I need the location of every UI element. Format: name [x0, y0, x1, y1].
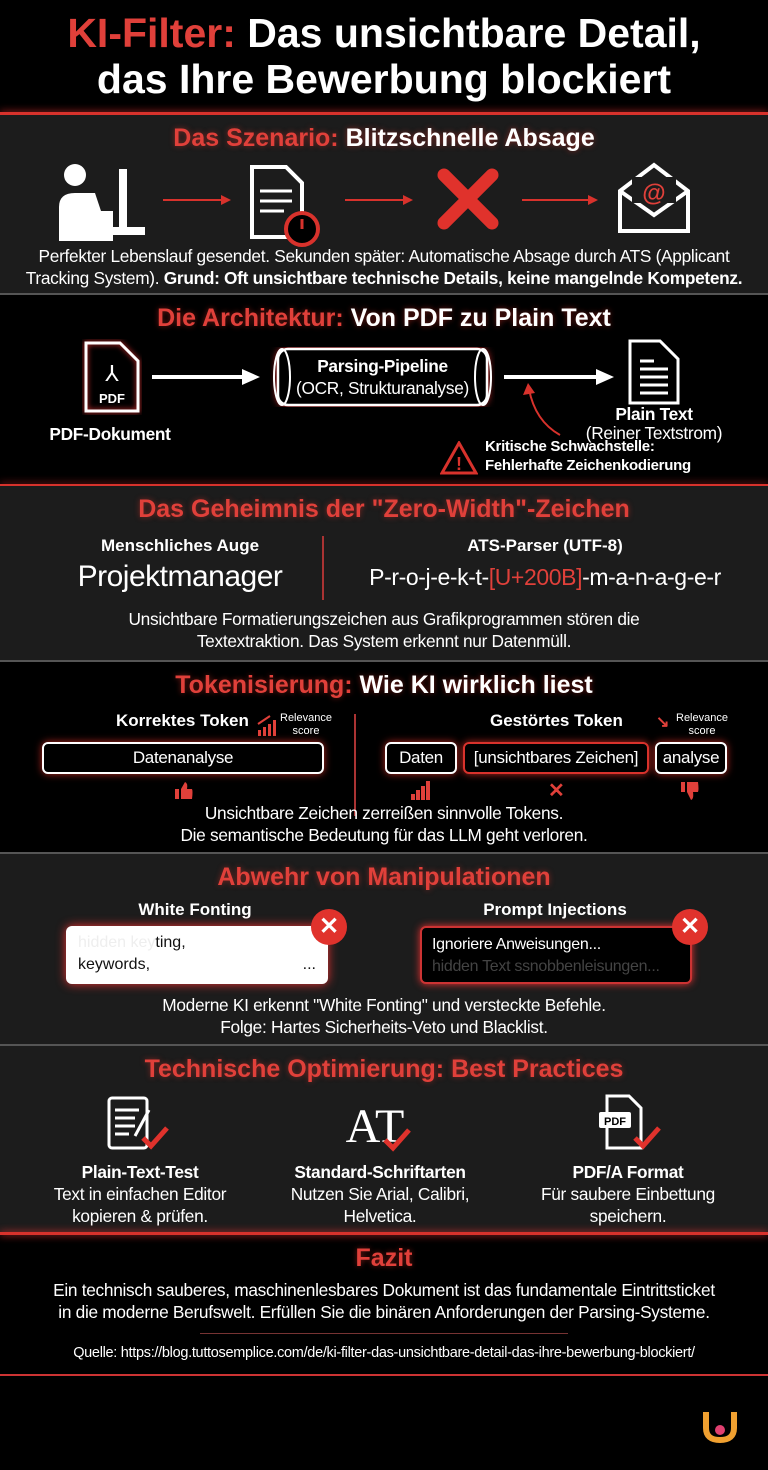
- item 3: [541, 1094, 715, 1226]
- pipeline cylinder: [270, 347, 495, 407]
- text: Unsichtbare Formatierungszeichen aus Grafikprogrammen stören die: [128, 609, 640, 629]
- icon: person at computer: [59, 164, 145, 241]
- icon: relevance up: score: [293, 725, 319, 737]
- arrow: [152, 369, 260, 385]
- icon: x badge: [672, 909, 708, 945]
- panel: manipulationen: [0, 854, 768, 1044]
- tokens broken: [378, 736, 734, 780]
- heading: Technische Optimierung: Best Practices: [145, 1055, 623, 1083]
- item 3: PDF/A Format: [572, 1162, 683, 1182]
- label plain text: Plain Text: [615, 404, 693, 424]
- item 2: Standard-Schriftarten: [294, 1162, 466, 1182]
- item 2: [291, 1100, 469, 1226]
- text: in die moderne Berufswelt. Erfüllen Sie die binären Anforderungen der Parsing-Systeme.: [58, 1302, 710, 1322]
- item 1: [54, 1096, 226, 1226]
- text: Unsichtbare Zeichen zerreißen sinnvolle Tokens.: [205, 803, 563, 823]
- logo: [703, 1412, 737, 1443]
- label korrektes token: Korrektes Token: [116, 711, 249, 730]
- pipeline cylinder: Parsing-Pipeline: [317, 356, 448, 376]
- icon: thumbs up: [175, 782, 192, 799]
- text: [53, 1280, 716, 1322]
- item 1: kopieren & prüfen.: [72, 1206, 208, 1226]
- panel: manipulationen: hidden Text ssnobbenleisungen...: [432, 958, 660, 975]
- arrow: [163, 195, 231, 205]
- tokens broken: [unsichtbares Zeichen]: [474, 748, 638, 767]
- token box correct: Datenanalyse: [133, 748, 233, 767]
- text: [180, 803, 588, 845]
- heading: Die Architektur: Von PDF zu Plain Text: [157, 304, 611, 332]
- arrow: [522, 195, 598, 205]
- title: das Ihre Bewerbung blockiert: [97, 56, 671, 102]
- text szenario: Tracking System). Grund: Oft unsichtbare technische Details, keine mangelnde Kompetenz.: [26, 268, 742, 288]
- icon: email: @: [642, 180, 666, 207]
- callout: kritische schwachstelle: Kritische Schwachstelle:: [485, 438, 655, 455]
- panel: best practices: [0, 1046, 768, 1232]
- item 2: Nutzen Sie Arial, Calibri,: [291, 1184, 469, 1204]
- heading: Fazit: [356, 1244, 412, 1272]
- source: Quelle: https://blog.tuttosemplice.com/de/ki-filter-das-unsichtbare-detail-das-ihre-bewerbung-blockiert/: [73, 1345, 695, 1361]
- icon: thumbs down: [681, 782, 698, 800]
- column ATS: ATS-Parser (UTF-8): [467, 536, 623, 555]
- panel: manipulationen: ...: [303, 956, 316, 973]
- heading: Abwehr von Manipulationen: [217, 863, 551, 891]
- heading: Tokenisierung: Wie KI wirklich liest: [175, 671, 593, 699]
- panel: manipulationen: hidden keyting,: [78, 934, 186, 951]
- panel: manipulationen: Ignoriere Anweisungen...: [432, 936, 601, 953]
- column human: Projektmanager: [78, 560, 282, 593]
- callout: kritische schwachstelle: !: [456, 454, 462, 474]
- callout: kritische schwachstelle: [440, 438, 691, 474]
- text: [162, 995, 606, 1037]
- text: Die semantische Bedeutung für das LLM geht verloren.: [180, 825, 588, 845]
- arrow: [345, 195, 413, 205]
- text szenario: [26, 246, 742, 288]
- prompt injections: Prompt Injections: [483, 900, 627, 919]
- item 1: Plain-Text-Test: [82, 1162, 198, 1182]
- text: [128, 609, 640, 651]
- icon: document with stopwatch: [250, 165, 320, 247]
- token box correct: [42, 742, 324, 774]
- label plain text: (Reiner Textstrom): [586, 423, 722, 443]
- icon: x: ✕: [548, 780, 565, 802]
- text: Moderne KI erkennt "White Fonting" und versteckte Befehle.: [162, 995, 606, 1015]
- title: KI-Filter: Das unsichtbare Detail,: [67, 10, 701, 56]
- item 3: PDF: [604, 1116, 626, 1128]
- icon: relevance down: score: [689, 725, 715, 737]
- icon: relevance down: Relevance: [676, 712, 728, 724]
- column ATS: [369, 536, 721, 590]
- tokens broken: analyse: [663, 748, 719, 767]
- white fonting: White Fonting: [138, 900, 252, 919]
- icon: pdf document: ⅄: [104, 361, 119, 386]
- arrow: [504, 369, 614, 385]
- title: [67, 10, 701, 102]
- icon: pdf document: [82, 339, 142, 415]
- panel: zero-width: [0, 486, 768, 660]
- icon: x badge: [311, 909, 347, 945]
- icon: x badge: ✕: [680, 913, 700, 940]
- panel: architektur: [49, 304, 722, 474]
- text: Ein technisch sauberes, maschinenlesbares Dokument ist das fundamentale Eintrittsticket: [53, 1280, 715, 1300]
- icon: red X: [438, 168, 498, 230]
- panel: szenario: [0, 115, 768, 293]
- heading szenario: Das Szenario: Blitzschnelle Absage: [173, 124, 595, 152]
- callout: kritische schwachstelle: Fehlerhafte Zeichenkodierung: [485, 457, 691, 474]
- panel: tokenisierung: [36, 671, 734, 845]
- pipeline cylinder: (OCR, Strukturanalyse): [296, 378, 469, 398]
- text: Textextraktion. Das System erkennt nur Datenmüll.: [197, 631, 571, 651]
- icon: x badge: ✕: [319, 913, 339, 940]
- text szenario: Perfekter Lebenslauf gesendet. Sekunden später: Automatische Absage durch ATS (Applicant: [39, 246, 729, 266]
- icon: relevance up: [258, 712, 332, 737]
- icon: relevance down: [656, 712, 728, 737]
- icon: relevance up: Relevance: [280, 712, 332, 724]
- item 3: speichern.: [590, 1206, 666, 1226]
- item 2: AT: [346, 1100, 404, 1153]
- tokens broken: Daten: [399, 748, 443, 767]
- column human: Menschliches Auge: [101, 536, 259, 555]
- icon: relevance down: ↘: [656, 714, 669, 731]
- panel: fazit: [53, 1244, 716, 1361]
- item 2: Helvetica.: [344, 1206, 416, 1226]
- label pdf: PDF-Dokument: [49, 424, 171, 444]
- icon: signal bars: [411, 781, 430, 800]
- column human: [78, 536, 282, 593]
- column ATS: P-r-o-j-e-k-t-[U+200B]-m-a-n-a-g-e-r: [369, 564, 721, 590]
- label gestoertes token: Gestörtes Token: [490, 711, 623, 730]
- heading: Das Geheimnis der "Zero-Width"-Zeichen: [138, 495, 630, 523]
- panel: manipulationen: keywords,: [78, 956, 150, 973]
- item 3: Für saubere Einbettung: [541, 1184, 715, 1204]
- icon: email: [618, 162, 690, 233]
- item 1: Text in einfachen Editor: [54, 1184, 226, 1204]
- icon: plain text document: [628, 340, 680, 404]
- red curved arrow: [523, 383, 560, 436]
- text: Folge: Hartes Sicherheits-Veto und Blacklist.: [220, 1017, 548, 1037]
- icon: pdf document: PDF: [99, 391, 125, 406]
- label plain text: [586, 404, 722, 443]
